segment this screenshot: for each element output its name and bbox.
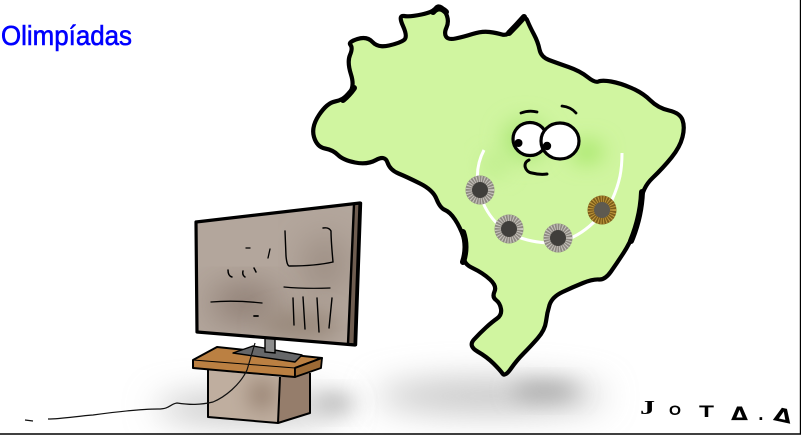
- screen: [195, 204, 355, 344]
- signature: .: [758, 406, 764, 424]
- right eye: [541, 123, 579, 159]
- signature: Δ: [772, 403, 794, 429]
- left eye: [513, 122, 547, 156]
- screen shading: [211, 237, 343, 339]
- green cheek glow: [483, 120, 603, 174]
- pupils: [514, 139, 522, 147]
- eyebrows: [521, 106, 576, 113]
- tv monitor: [195, 203, 361, 345]
- side edge: [348, 203, 361, 345]
- power cable: [25, 343, 255, 421]
- medal: silver 2: [494, 214, 524, 244]
- floor shadows: [155, 381, 605, 420]
- signature: [640, 397, 794, 429]
- screen sketch marks: [211, 228, 333, 332]
- map of Brazil: [313, 6, 684, 375]
- signature: O: [669, 402, 681, 418]
- map fill and outline: [313, 6, 684, 375]
- face: [513, 106, 579, 174]
- necklace smile: [477, 150, 622, 243]
- signature: J: [640, 397, 655, 419]
- tv stand: [233, 336, 302, 362]
- signature: T: [699, 402, 715, 421]
- signature: Δ: [731, 403, 748, 425]
- medal: silver 1: [466, 176, 494, 204]
- wooden table top: [193, 347, 322, 377]
- title: Olimpíadas: [1, 20, 132, 51]
- medal: silver 3: [544, 224, 572, 252]
- cardboard box: [208, 370, 310, 423]
- frame: [196, 203, 360, 345]
- nose: [525, 160, 547, 174]
- medal: gold: [588, 196, 616, 224]
- heavier outline strokes: [343, 8, 642, 262]
